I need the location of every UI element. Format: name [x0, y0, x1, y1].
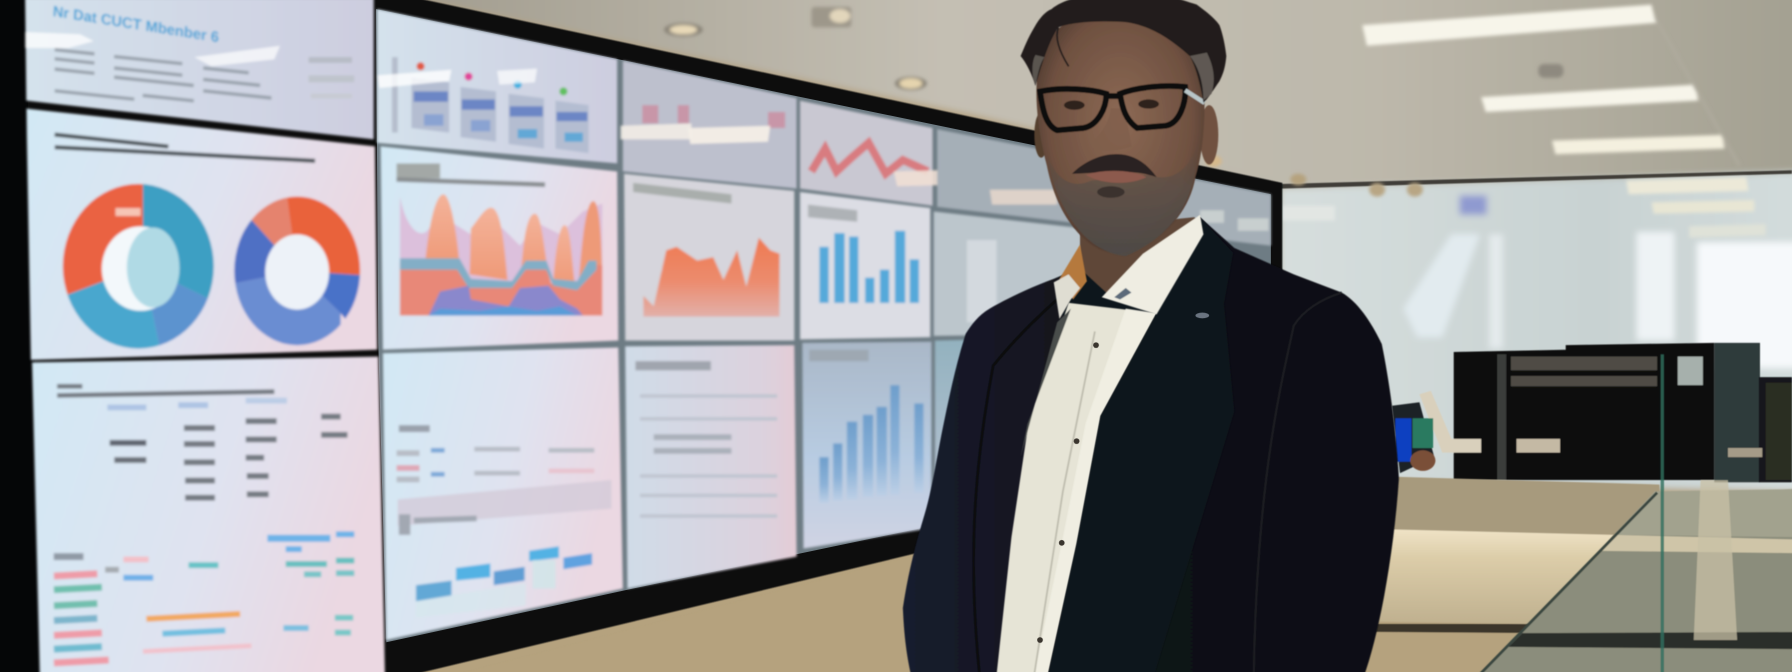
ceiling lights — [664, 5, 1766, 238]
lapel — [1048, 217, 1234, 672]
text lines — [57, 384, 347, 501]
panel: far top screen — [937, 129, 1271, 246]
floor left of man — [457, 555, 937, 672]
grey temple — [1190, 53, 1214, 101]
lapel pin — [1195, 313, 1209, 318]
ceiling — [366, 0, 1792, 189]
panel: table faint screen — [625, 345, 797, 589]
glasses — [1040, 86, 1185, 130]
office desks and partitions — [1392, 343, 1792, 482]
chart: bars — [416, 546, 592, 617]
face — [1036, 9, 1205, 254]
lips — [1086, 171, 1146, 183]
glass office wall — [1280, 171, 1792, 491]
panel: blue bar chart screen — [800, 192, 930, 339]
blazer — [903, 217, 1399, 672]
table rows — [54, 48, 354, 102]
panel: far middle screen — [934, 211, 1086, 336]
ears — [1034, 112, 1048, 158]
chart: area — [400, 194, 602, 315]
video wall frame — [0, 0, 1282, 672]
panel: list screen — [32, 357, 385, 672]
blue glow — [1459, 195, 1487, 215]
beard — [1047, 143, 1198, 256]
reception counter — [1360, 477, 1659, 672]
shirt — [997, 303, 1157, 672]
panel: data table screen — [25, 0, 374, 139]
ceiling edge — [1280, 170, 1792, 189]
coloured rows — [54, 531, 354, 666]
bright window — [1697, 242, 1792, 368]
office partition shape — [1403, 234, 1480, 337]
chin patch — [1097, 186, 1125, 198]
panel: far bottom screen — [935, 338, 1029, 523]
panel: blue growth bars screen — [802, 342, 931, 549]
panel: stacked area chart screen — [381, 146, 618, 350]
text lines — [397, 425, 611, 535]
shirt buttons — [1037, 342, 1099, 643]
panel: orange area chart screen — [624, 174, 794, 341]
head — [1021, 0, 1226, 256]
video wall screens — [25, 0, 1271, 672]
panel: KPI cards screen — [377, 9, 617, 163]
chart: area — [643, 238, 779, 317]
man in dark blazer — [903, 0, 1399, 672]
chart: left donut — [61, 182, 216, 350]
chart: right donut — [232, 195, 362, 347]
sleeve and seam shading — [1254, 293, 1342, 672]
collar — [1054, 215, 1203, 319]
panel: red wave chart screen — [800, 101, 981, 206]
nose — [1089, 109, 1131, 151]
text lines — [54, 133, 315, 163]
chart title lines — [396, 163, 545, 187]
chart: bars — [819, 231, 919, 303]
glass balustrade — [1480, 354, 1792, 672]
mustache — [1072, 154, 1157, 177]
chart: bars — [819, 385, 923, 503]
panel: pink line chart screen — [621, 61, 797, 189]
neck — [1080, 217, 1200, 295]
panel: donut charts screen — [26, 109, 377, 366]
panel: mixed chart screen — [383, 347, 623, 640]
eyes — [1064, 101, 1085, 110]
hair — [1021, 0, 1226, 103]
heading: table title: Nr Dat CUCT Mbenber 6 — [52, 4, 219, 46]
